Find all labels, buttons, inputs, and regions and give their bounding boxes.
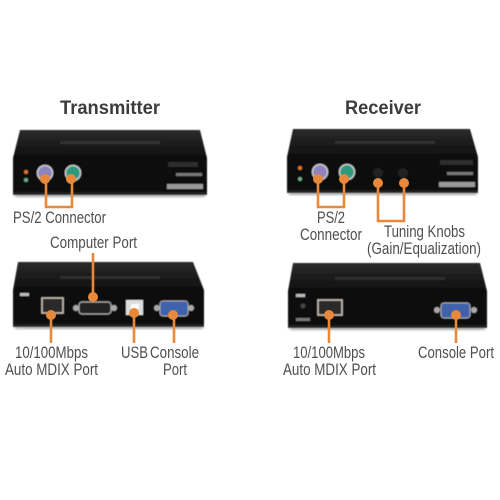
label: Tuning Knobs (Gain/Equalization): Tuning Knobs (384, 223, 465, 241)
panel: transmitter front device (13, 130, 207, 197)
label: transmitter Console Port: Console (150, 344, 199, 362)
callout: transmitter console line (168, 310, 178, 343)
callout: tuning knob lines (373, 178, 409, 221)
label: transmitter Console Port (150, 344, 199, 379)
label: receiver 10/100Mbps Auto MDIX Port: Auto MDIX Port (283, 361, 376, 379)
callout: USB line (129, 308, 139, 343)
callout: receiver console line (451, 310, 461, 343)
label: receiver PS/2 Connector: Connector (300, 226, 362, 244)
label: Computer Port: Computer Port (50, 234, 137, 252)
label: transmitter 10/100Mbps Auto MDIX Port: Auto MDIX Port (5, 361, 98, 379)
callout: computer port line (88, 253, 98, 302)
panel: receiver front device (287, 129, 478, 195)
label: receiver PS/2 Connector: PS/2 (317, 209, 345, 227)
label: transmitter Console Port: Port (163, 361, 187, 379)
label: receiver PS/2 Connector (300, 209, 362, 244)
callout: transmitter PS/2 connector lines (40, 174, 76, 207)
panel: receiver back device (288, 263, 487, 330)
callout: receiver network port line (324, 310, 334, 343)
label: USB: USB (121, 344, 148, 362)
title: Receiver: Receiver (345, 98, 422, 119)
label: PS/2 Connector: PS/2 Connector (13, 209, 106, 227)
label: transmitter 10/100Mbps Auto MDIX Port: 10/100Mbps (15, 344, 88, 362)
callout: transmitter network port line (46, 310, 56, 343)
title: Transmitter: Transmitter (60, 98, 161, 119)
label: Tuning Knobs (Gain/Equalization) (367, 223, 481, 258)
label: receiver 10/100Mbps Auto MDIX Port: 10/100Mbps (293, 344, 365, 362)
callout: receiver PS/2 connector lines (313, 174, 349, 207)
label: transmitter 10/100Mbps Auto MDIX Port (5, 344, 98, 379)
panel: transmitter back device (13, 262, 204, 329)
label: receiver 10/100Mbps Auto MDIX Port (283, 344, 376, 379)
